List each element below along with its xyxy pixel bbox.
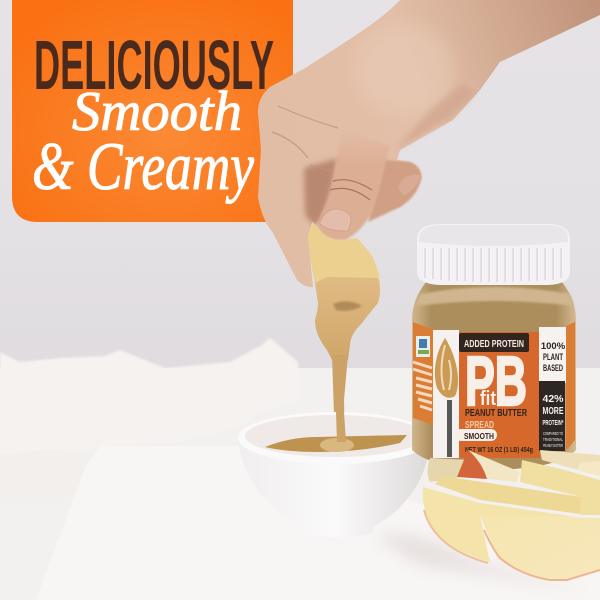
- thumbnail: [320, 209, 351, 231]
- script: smooth: Smooth: [72, 81, 242, 143]
- more protein badge: MORE: [542, 405, 564, 417]
- orange banner: [12, 0, 293, 222]
- fingernail: [398, 175, 420, 196]
- more protein badge: COMPARED TO: [543, 431, 563, 436]
- more protein badge: PROTEIN*: [542, 418, 564, 427]
- PB fit logo: fit: [480, 388, 496, 410]
- spoon icon: [435, 338, 458, 457]
- table surface: [0, 368, 600, 600]
- thumb: [317, 128, 390, 240]
- drip end: [336, 412, 346, 442]
- plant based badge: PLANT: [543, 352, 563, 363]
- thumb creases: [330, 180, 372, 200]
- rim: [238, 412, 432, 464]
- middle slice: [435, 476, 582, 514]
- smooth pill: SMOOTH: [464, 431, 494, 441]
- plant based badge: [539, 327, 566, 383]
- spread: SPREAD: [465, 419, 494, 431]
- marble board: [36, 446, 600, 600]
- heading: deliciously: DELICIOUSLY: [34, 26, 274, 104]
- script: creamy: & Creamy: [32, 128, 255, 204]
- more protein badge: 42%: [542, 393, 564, 405]
- side text panel: [413, 336, 432, 410]
- PB fit logo: PB: [465, 342, 527, 420]
- bowl: [238, 412, 432, 537]
- cloth: [0, 338, 300, 505]
- butter drip: [332, 355, 348, 445]
- side lines: [413, 362, 432, 410]
- added protein: ADDED PROTEIN: [464, 338, 524, 350]
- jar body: [412, 282, 576, 470]
- lid: [417, 224, 570, 285]
- large slice: [423, 487, 577, 562]
- product name: PEANUT BUTTER: [465, 407, 527, 419]
- butter in bowl: [265, 435, 407, 452]
- lower finger: [368, 160, 421, 222]
- back right slice: [520, 460, 600, 515]
- white spoon strip: [433, 330, 459, 458]
- shadow on lower hand: [395, 84, 476, 150]
- more protein badge: [539, 381, 565, 451]
- red slice: [468, 450, 520, 482]
- background wall: [0, 0, 600, 378]
- more protein badge: TRADITIONAL: [543, 437, 563, 442]
- plant based badge: BASED: [543, 363, 563, 374]
- hand: [258, 0, 600, 287]
- PB fit logo: [465, 342, 527, 420]
- apple slice dipped: [308, 222, 380, 360]
- label orange: [413, 322, 575, 458]
- logo: [416, 336, 430, 357]
- orange label centre: [459, 332, 540, 458]
- highlight on back of hand: [355, 25, 455, 115]
- net weight: NET WT 16 OZ (1 LB) 454g: [465, 445, 533, 454]
- apple slices: [423, 450, 600, 580]
- shadow between fingers: [304, 158, 338, 228]
- more protein badge: PEANUT BUTTER: [543, 443, 563, 448]
- added protein: [459, 333, 529, 352]
- knuckle creases: [272, 106, 338, 172]
- jar: [412, 224, 576, 470]
- smooth pill: [455, 429, 497, 441]
- front slice: [480, 515, 600, 580]
- back slices: [540, 450, 600, 470]
- butter swirl: [320, 438, 354, 452]
- bowl interior: [245, 415, 425, 457]
- shadow under bowl and apples: [375, 534, 590, 590]
- jar base tint: [428, 458, 470, 482]
- plant based badge: 100%: [541, 341, 566, 352]
